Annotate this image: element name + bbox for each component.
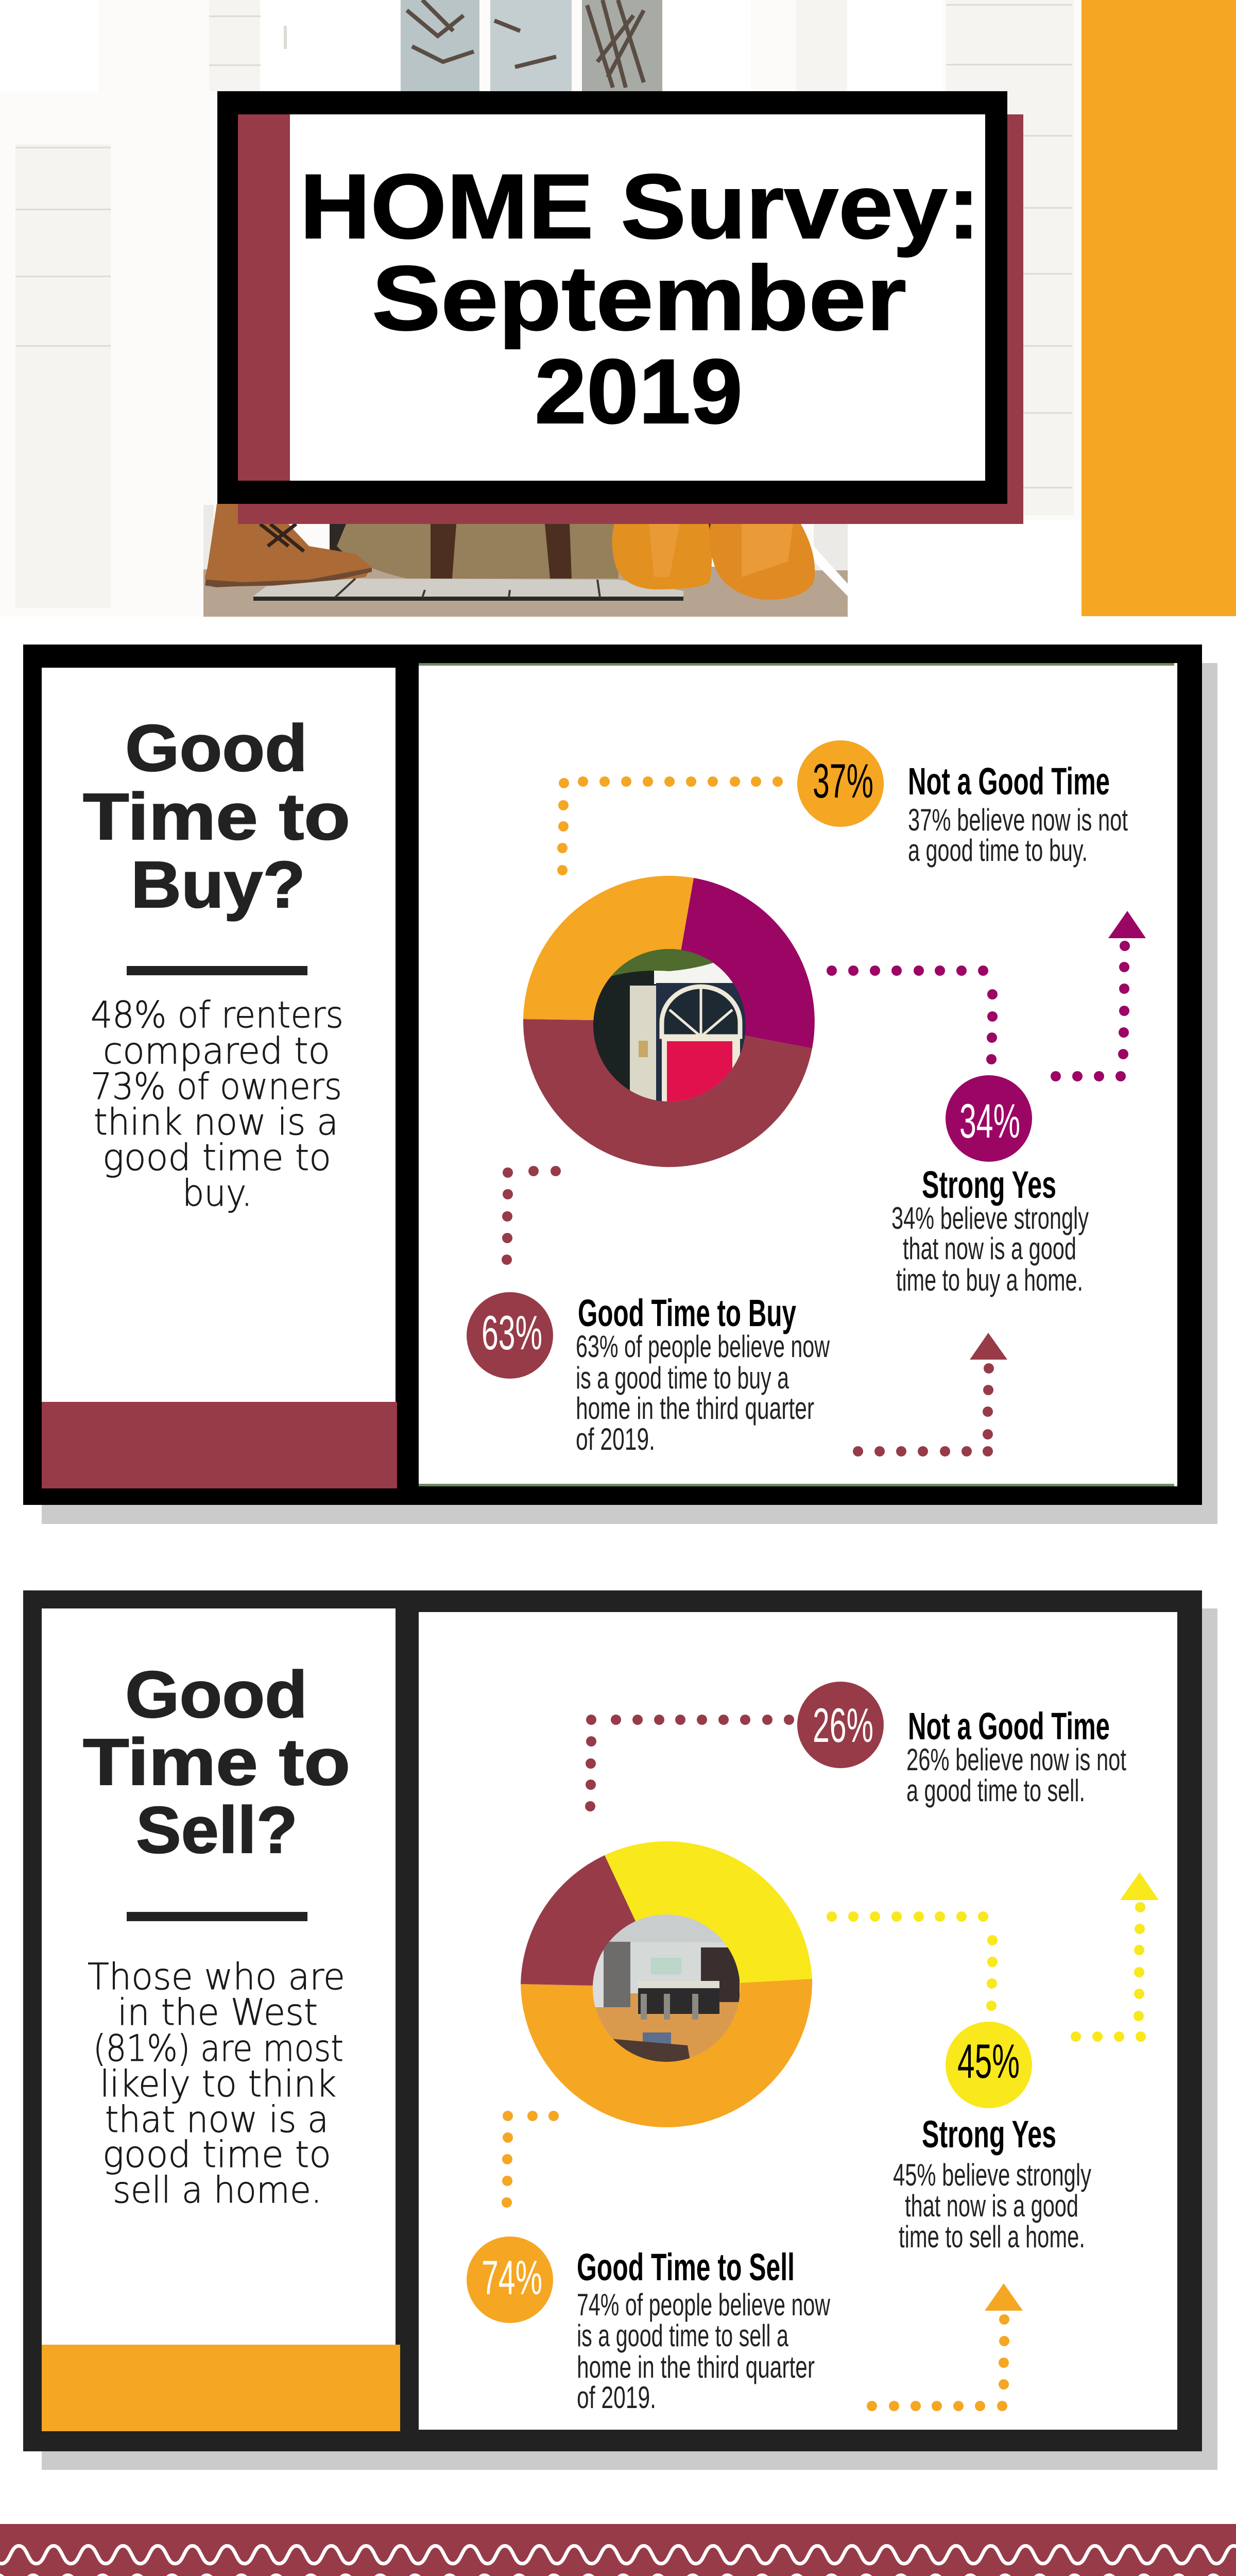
text block: good time to sell: Good Time to Sell: [577, 2246, 795, 2289]
arrow: maroon dotted: [853, 1333, 1007, 1456]
text block: not a good time: [906, 1705, 1126, 1808]
left column: compared to: [103, 1030, 330, 1072]
text block: strong yes: [891, 1163, 1089, 1297]
badge: 37 percent: 37%: [813, 754, 873, 808]
pumpkins: [612, 524, 815, 600]
left column: likely to think: [100, 2063, 336, 2105]
divider band with wave pattern: [0, 2524, 1236, 2576]
text block: strong yes: that now is a good: [905, 2189, 1078, 2223]
hero photo: porch with boot and pumpkins: [0, 0, 1082, 617]
text block: not a good time: a good time to buy.: [908, 833, 1088, 868]
text block: good time to buy: [576, 1292, 830, 1456]
text block: strong yes: 34% believe strongly: [891, 1201, 1089, 1235]
badge: 74 percent: [467, 2236, 553, 2323]
badge: 26 percent: 26%: [813, 1698, 873, 1752]
door mat: [253, 579, 683, 601]
left column: good time to: [102, 1137, 331, 1179]
text block: not a good time: a good time to sell.: [906, 1773, 1085, 1808]
text block: not a good time: 26% believe now is not: [906, 1742, 1126, 1777]
text block: not a good time: Not a Good Time: [908, 1705, 1110, 1748]
text block: not a good time: Not a Good Time: [908, 760, 1110, 803]
donut chart: buy: [523, 876, 815, 1167]
title card: [217, 91, 1023, 524]
connector dots: orange: [502, 2111, 559, 2208]
left column: Time to: [83, 780, 350, 854]
donut photo: red front door: [592, 947, 752, 1106]
left column: think now is a: [94, 1101, 338, 1143]
connector dots: orange: [557, 776, 783, 875]
arrow: orange dotted: [867, 2283, 1023, 2411]
left column: in the West: [117, 1991, 318, 2033]
text block: not a good time: 37% believe now is not: [908, 803, 1128, 837]
text block: good time to sell: home in the third quarter: [577, 2350, 815, 2384]
text block: strong yes: Strong Yes: [922, 1163, 1056, 1206]
left column: Sell?: [136, 1793, 298, 1867]
badge: 34 percent: [946, 1075, 1032, 1162]
text block: strong yes: time to sell a home.: [899, 2219, 1085, 2254]
left column: Buy?: [131, 848, 305, 922]
left column: [42, 668, 397, 1488]
badge: 74 percent: 74%: [482, 2250, 542, 2304]
title text: HOME Survey:: [300, 155, 980, 258]
text block: good time to sell: is a good time to sell a: [577, 2318, 788, 2353]
text block: good time to sell: 74% of people believe now: [577, 2287, 830, 2322]
left column: good time to: [102, 2133, 331, 2176]
badge: 63 percent: [467, 1292, 553, 1379]
donut chart: sell: [521, 1841, 812, 2127]
text block: not a good time: [908, 760, 1128, 868]
left column: Time to: [83, 1725, 350, 1799]
connector dots: maroon: [585, 1715, 794, 1811]
boot: [205, 504, 372, 587]
text block: good time to sell: [577, 2246, 830, 2415]
left column: sell a home.: [113, 2169, 322, 2211]
arrow: yellow dotted: [1071, 1872, 1159, 2042]
left column: 73% of owners: [91, 1065, 342, 1108]
panel: good time to buy: [23, 645, 1217, 1524]
text block: good time to buy: 63% of people believe now: [576, 1329, 830, 1364]
arrow: purple dotted: [1051, 911, 1146, 1081]
right column: [419, 663, 1177, 1486]
text block: good time to buy: is a good time to buy a: [576, 1361, 789, 1395]
left column: Those who are: [88, 1956, 345, 1998]
text block: strong yes: Strong Yes: [922, 2113, 1056, 2156]
connector dots: purple: [827, 965, 998, 1064]
title line 3: 2019: [535, 340, 743, 443]
badge: 45 percent: [946, 2022, 1032, 2108]
left column: Good: [125, 1658, 307, 1732]
orange side block: [1082, 0, 1236, 616]
text block: good time to buy: home in the third quarter: [576, 1391, 814, 1426]
title line 2: September: [372, 247, 906, 349]
donut photo: kitchen: [592, 1914, 742, 2065]
left column: 48% of renters: [91, 994, 344, 1036]
door window panes: [401, 0, 662, 91]
text block: strong yes: 45% believe strongly: [893, 2158, 1091, 2192]
text block: strong yes: that now is a good: [903, 1231, 1076, 1266]
porch floor: [203, 567, 848, 617]
right column: [419, 1612, 1177, 2430]
badge: 34 percent: 34%: [959, 1094, 1020, 1148]
connector dots: maroon: [502, 1166, 561, 1265]
connector dots: yellow: [827, 1911, 998, 2011]
left column: Good: [125, 711, 307, 785]
badge: 37 percent: [797, 740, 884, 827]
badge: 26 percent: [797, 1682, 884, 1768]
duffel bag: [330, 520, 713, 579]
railing: [814, 520, 863, 617]
badge: 45 percent: 45%: [957, 2034, 1020, 2088]
panel: good time to sell: [23, 1590, 1217, 2470]
left column: [42, 1608, 400, 2431]
left column: buy.: [182, 1172, 252, 1214]
badge: 63 percent: 63%: [482, 1306, 542, 1360]
text block: good time to sell: of 2019.: [577, 2380, 656, 2415]
text block: good time to buy: of 2019.: [576, 1422, 655, 1456]
text block: strong yes: [893, 2113, 1091, 2254]
left column: that now is a: [105, 2098, 329, 2141]
left column: (81%) are most: [93, 2027, 344, 2070]
text block: good time to buy: Good Time to Buy: [578, 1292, 796, 1334]
text block: strong yes: time to buy a home.: [896, 1263, 1083, 1297]
